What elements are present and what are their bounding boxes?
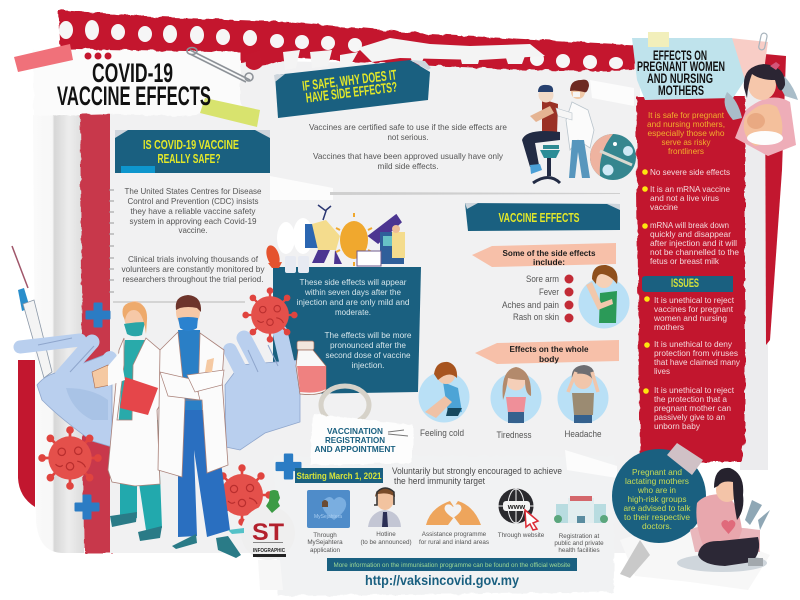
- icon: paperclip: [758, 33, 768, 50]
- icon: plus: [277, 455, 300, 478]
- heading: issues: [642, 276, 733, 292]
- panel: left grey paper strip: [18, 112, 113, 553]
- text: CDC safety system: vaccine.: [178, 225, 208, 235]
- heading banner: IF SAFE, WHY DOES IT: [301, 66, 398, 94]
- title: COVID-19 VACCINE EFFECTS: [57, 58, 211, 111]
- text: certified safe: not serious.: [388, 132, 428, 142]
- bullet list: issues: unborn baby: [654, 421, 701, 431]
- icon: headache: [558, 365, 608, 424]
- bullet list: vaccine facts: mRNA will break down: [650, 220, 729, 230]
- bullet list: issues: It is unethical to reject: [654, 295, 735, 305]
- text: safe for pregnant: serve as risky: [662, 137, 711, 147]
- callout: high-risk mothers: high-risk groups: [628, 494, 686, 504]
- arrow label: effects on the whole body: [475, 340, 619, 364]
- text: CDC safety system: [122, 186, 265, 284]
- text: certified safe: [309, 122, 507, 171]
- heading: issues: ISSUES: [671, 276, 699, 290]
- text: certified safe: Vaccines are certified safe to use if the side effects are: [309, 122, 507, 132]
- heading note: AND APPOINTMENT: [314, 444, 396, 454]
- arrow label: side effects include: [472, 243, 616, 267]
- label: tiredness: Tiredness: [496, 430, 532, 440]
- bullet list: vaccine facts: quickly and disappear: [650, 229, 731, 239]
- date badge: [295, 468, 383, 483]
- channel: health facilities: Registration at: [559, 533, 600, 540]
- bullet list: issues: that have claimed many: [654, 357, 741, 367]
- icon: plus upper: [86, 304, 110, 326]
- channel: assistance programme: for rural and inland areas: [419, 539, 489, 546]
- icon: red push pin: [264, 244, 282, 268]
- illustration: left hand with syringe: [12, 246, 112, 447]
- icon: safety pin: [187, 48, 253, 82]
- badge: ST infographic: [228, 490, 295, 590]
- arrow label: effects on the whole body: Effects on the whole: [510, 344, 589, 354]
- heading note: VACCINATION: [327, 426, 383, 436]
- heading banner: IS COVID-19 VACCINE: [143, 137, 239, 152]
- bullet list: issues: women and nursing: [653, 313, 727, 323]
- panel: main paper sheet: [110, 58, 640, 600]
- illustration: female doctor: [92, 301, 163, 541]
- text: timing of side effects: pronounced after the: [330, 340, 406, 350]
- text: CDC safety system: The United States Centres for Disease: [124, 186, 262, 196]
- icon: injection circle: [590, 134, 636, 180]
- text: timing of side effects: injection and are only mild and: [296, 297, 410, 307]
- icon: tiredness: [490, 367, 542, 424]
- label: headache: Headache: [564, 429, 602, 439]
- arrow label: side effects include: Some of the side effects: [502, 248, 596, 258]
- text: CDC safety system: Clinical trials involving thousands of: [128, 254, 259, 264]
- banner: more information: More information on the immunisation programme can be found on the official website: [334, 562, 571, 569]
- text: timing of side effects: The effects will be more: [324, 330, 412, 340]
- icon: virus lower left: [40, 428, 100, 488]
- icon: vaccine laboratory: [277, 205, 405, 273]
- bullet list: vaccine facts: and not a live virus: [650, 193, 719, 203]
- bullet list: issues: lives: [654, 366, 670, 376]
- bullet list: issues: mothers: [654, 322, 684, 332]
- bullet list: issues: protection from viruses: [654, 348, 738, 358]
- title: COVID-19 VACCINE EFFECTS: VACCINE EFFECTS: [57, 81, 211, 111]
- channel: MySejahtera: [307, 490, 350, 554]
- panel: vaccine effects: [418, 203, 630, 440]
- channel: hotline: Hotline: [376, 531, 396, 538]
- arrow label: effects on the whole body: body: [539, 354, 559, 364]
- heading: effects on pregnant women: [632, 32, 745, 100]
- callout: high-risk mothers: doctors.: [642, 521, 672, 531]
- link: official website: http://vaksincovid.gov.my: [365, 573, 519, 588]
- icon: plus lower: [76, 496, 98, 518]
- text: certified safe: mild side effects.: [378, 161, 438, 171]
- text: timing of side effects: moderate.: [335, 307, 371, 317]
- heading banner: [274, 60, 431, 118]
- text: safe for pregnant: especially those who: [648, 128, 725, 138]
- channel: health facilities: health facilities: [558, 547, 600, 554]
- bullet list: vaccine facts: after injection and it will: [650, 238, 737, 248]
- text: voluntary note: [392, 466, 562, 486]
- icon: roll of tape: [321, 386, 369, 424]
- panel: vaccination registration: [277, 413, 608, 588]
- heading banner: HAVE SIDE EFFECTS?: [305, 78, 398, 106]
- badge: ST infographic: INFOGRAPHIC: [253, 548, 285, 554]
- heading: effects on pregnant women: PREGNANT WOMEN: [637, 59, 725, 74]
- list: side effects: Aches and pain: [502, 300, 559, 310]
- channel: website: Through website: [498, 532, 545, 539]
- panel: if safe, why side effects: [274, 60, 636, 183]
- heading banner: VACCINE EFFECTS: [498, 210, 580, 225]
- text: safe for pregnant: and nursing mothers,: [647, 119, 725, 129]
- panel: right pregnant women column: [612, 32, 798, 590]
- heading: effects on pregnant women: AND NURSING: [647, 71, 713, 86]
- text: safe for pregnant: It is safe for pregnant: [648, 110, 725, 120]
- list: side effects: Sore arm: [526, 274, 559, 284]
- bullet list: vaccine facts: [642, 167, 739, 266]
- bullet list: issues: the protection that a: [654, 394, 727, 404]
- channel: health facilities: public and private: [554, 540, 604, 547]
- callout: high-risk mothers: are advised to talk: [624, 503, 691, 513]
- channel: assistance programme: [419, 501, 489, 546]
- channel: health facilities: [554, 496, 608, 554]
- heading: effects on pregnant women: EFFECTS ON: [653, 48, 707, 63]
- callout: high-risk mothers: Pregnant and: [632, 467, 682, 477]
- heading: effects on pregnant women: MOTHERS: [658, 83, 704, 98]
- heading banner: REALLY SAFE?: [158, 151, 221, 166]
- channel: website: www: [507, 502, 525, 511]
- text: timing of side effects: within seven days after the: [304, 287, 401, 297]
- panel: side effects timing: [264, 205, 421, 394]
- icon: pregnant woman sitting: [677, 468, 770, 572]
- heading note: [310, 413, 413, 465]
- bullet list: vaccine facts: vaccine: [650, 202, 678, 212]
- bullet list: vaccine facts: not be channelled to the: [650, 247, 739, 257]
- text: voluntary note: the herd immunity target: [394, 476, 486, 486]
- icon: virus upper right: [244, 289, 296, 341]
- list: side effects: Fever: [539, 287, 559, 297]
- icon: virus lower right: [213, 466, 271, 524]
- bullet list: vaccine facts: fetus or breast milk: [650, 256, 720, 266]
- bullet list: issues: pregnant mother can: [654, 403, 731, 413]
- channel: MySejahtera: MySejahtera: [307, 539, 343, 546]
- text: certified safe: Vaccines that have been approved usually have only: [313, 151, 504, 161]
- icon: nurse vaccinating patient: [522, 80, 594, 183]
- bullet list: issues: It is unethical to deny: [654, 339, 733, 349]
- text: timing of side effects: second dose of vaccine: [326, 350, 411, 360]
- heading banner: [465, 203, 620, 231]
- spiral binding: [109, 190, 114, 292]
- bullet list: issues: It is unethical to reject: [654, 385, 735, 395]
- icon: boy with sore arm: [578, 265, 630, 328]
- channel: MySejahtera: application: [310, 547, 341, 554]
- bullet list: issues: [643, 295, 741, 431]
- heading note: REGISTRATION: [325, 435, 385, 445]
- channel: MySejahtera: MySejahtera: [314, 514, 342, 520]
- callout: high-risk mothers: to their respective: [624, 512, 690, 522]
- text: CDC safety system: volunteers are constantly monitored by: [122, 264, 265, 274]
- arrow label: side effects include: include:: [533, 257, 565, 267]
- text: safe for pregnant: [647, 110, 725, 156]
- panel: red notebook strip with punched holes: [58, 10, 635, 71]
- text: timing of side effects: [296, 277, 412, 370]
- text: timing of side effects: These side effects will appear: [300, 277, 407, 287]
- channel: hotline: [360, 488, 412, 546]
- channel: MySejahtera: Through: [313, 532, 337, 539]
- icon: vial: [296, 341, 326, 394]
- channel: assistance programme: Assistance programme: [422, 531, 487, 538]
- panel: is covid-19 vaccine really safe: [109, 130, 270, 292]
- text: CDC safety system: they have a reliable vaccine safety: [130, 206, 256, 216]
- bullet list: issues: vaccines for pregnant: [654, 304, 734, 314]
- list: side effects: Rash on skin: [513, 312, 559, 322]
- illustration: right hand with vial: [225, 332, 300, 450]
- badge: ST infographic: ST: [252, 519, 284, 546]
- title: COVID-19 VACCINE EFFECTS: COVID-19: [92, 58, 173, 88]
- title paper: [14, 44, 262, 127]
- tape: green: [200, 98, 260, 127]
- label: feeling cold: Feeling cold: [420, 428, 464, 438]
- banner: more information: [327, 558, 577, 571]
- text: CDC safety system: Control and Prevention (CDC) insists: [128, 196, 258, 206]
- icon: feeling cold: [418, 362, 470, 422]
- bullet list: vaccine facts: No severe side effects: [650, 167, 730, 177]
- tape: pink: [14, 44, 73, 72]
- text: CDC safety system: system in approving each Covid-19: [130, 216, 257, 226]
- bullet list: issues: passively give to an: [654, 412, 725, 422]
- pink note: [730, 38, 768, 80]
- text: timing of side effects: injection.: [352, 360, 384, 370]
- icon: green push pin: [266, 490, 280, 513]
- list: side effects: [502, 274, 574, 322]
- illustration: male doctor: [158, 295, 241, 558]
- callout: high-risk mothers: who are in: [637, 485, 676, 495]
- text: voluntary note: Voluntarily but strongly encouraged to achieve: [392, 466, 562, 476]
- heading banner: [115, 130, 270, 173]
- date badge: Starting March 1, 2021: [296, 471, 382, 481]
- callout: high-risk mothers: lactating mothers: [625, 476, 689, 486]
- text: CDC safety system: researchers throughout the trial period.: [122, 274, 264, 284]
- text: safe for pregnant: frontliners: [668, 146, 704, 156]
- callout: high-risk mothers: [612, 443, 706, 543]
- bullet list: vaccine facts: It is an mRNA vaccine: [650, 184, 730, 194]
- channel: website: [498, 488, 545, 539]
- icon: nursing mother: [725, 62, 798, 156]
- channel: hotline: (to be announced): [360, 539, 412, 546]
